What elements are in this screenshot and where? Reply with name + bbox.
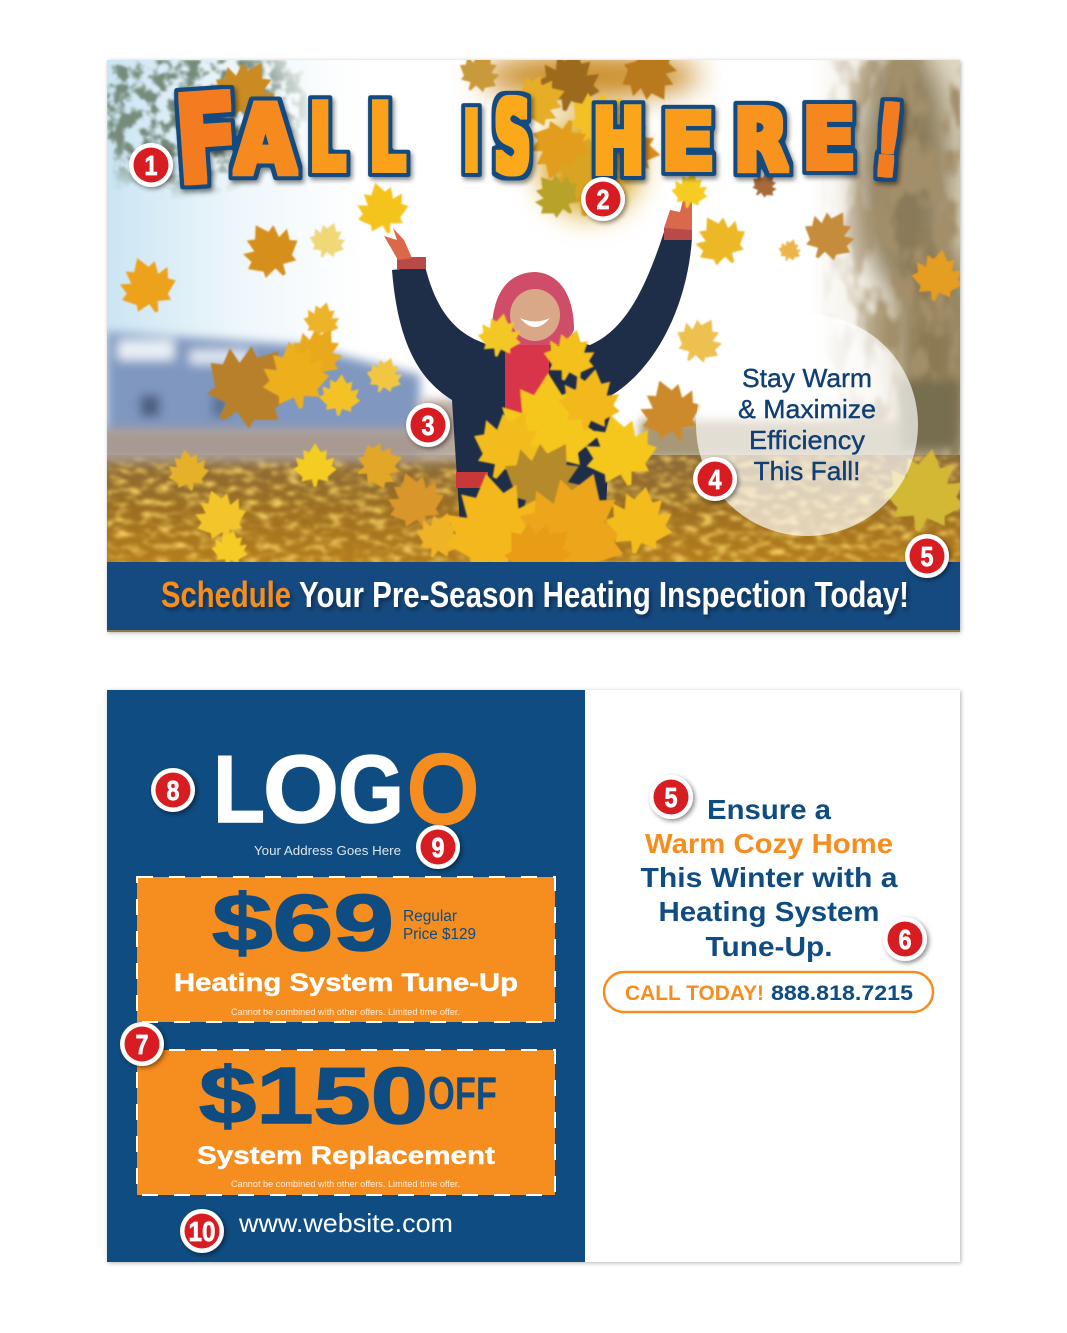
callout: translucent circle: Efficiency (749, 425, 865, 455)
banner: schedule inspection (107, 562, 960, 632)
photo: child throwing autumn leaves (107, 60, 960, 562)
callout: translucent circle: & Maximize (738, 394, 876, 424)
coupon: $150 off: Cannot be combined with other offers. Limited time offer. (231, 1179, 460, 1189)
callout: translucent circle: Stay Warm (742, 363, 872, 393)
coupon: $69 tune-up: $69 (212, 878, 394, 967)
logo: O (263, 736, 339, 843)
coupon: $150 off: OFF (428, 1067, 497, 1119)
panel: blue coupon column (107, 690, 585, 1262)
panel: postcard back (107, 690, 960, 1262)
badge 7: 7 (136, 1029, 148, 1060)
badge 6: 6 (898, 924, 912, 955)
figure: child in winter jacket (384, 188, 692, 525)
message: warm cozy home: Warm Cozy Home (645, 828, 893, 859)
title: Fall Is Here: A (235, 86, 296, 196)
badge 1: 1 (144, 150, 158, 181)
badge 9: 9 (432, 832, 444, 863)
message: warm cozy home: Heating System (658, 896, 880, 927)
badge 2: 2 (596, 184, 610, 215)
call to action pill: CALL TODAY! (625, 982, 764, 1005)
title: Fall Is Here (171, 69, 906, 212)
badge 10: 10 (188, 1216, 216, 1247)
coupon: $150 off: $150 (199, 1051, 428, 1140)
address: Your Address Goes Here (254, 843, 401, 858)
coupon: $69 tune-up (137, 877, 555, 1022)
badge 4: 4 (708, 464, 722, 495)
message: warm cozy home: Ensure a (707, 794, 831, 825)
panel: postcard front (100, 36, 975, 632)
message: warm cozy home: Tune-Up. (706, 931, 832, 962)
badge 8 (151, 768, 195, 812)
title: Fall Is Here: E (802, 90, 856, 188)
call to action pill: 888.818.7215 (771, 982, 913, 1005)
badge 4 (693, 457, 737, 501)
badge 5 front (905, 534, 949, 578)
title: Fall Is Here: R (734, 91, 788, 191)
title: Fall Is Here: F (171, 69, 243, 212)
badge 1 (129, 143, 173, 187)
title: Fall Is Here: ! (871, 84, 906, 198)
badge 5 back (649, 775, 693, 819)
badge 6 (883, 917, 927, 961)
logo: G (338, 736, 404, 843)
coupon: $150 off: System Replacement (197, 1142, 496, 1170)
callout: translucent circle: This Fall! (754, 456, 860, 486)
coupon: $150 off (137, 1050, 555, 1195)
logo: L (213, 736, 265, 843)
banner: schedule inspection: Schedule (161, 574, 291, 615)
badge 2 (581, 177, 625, 221)
badge 3: 3 (422, 410, 434, 441)
coupon: $69 tune-up: Regular (403, 908, 457, 925)
coupon: $69 tune-up: Price $129 (403, 926, 476, 943)
leaves (119, 60, 960, 562)
badge 7 (120, 1022, 164, 1066)
banner: schedule inspection: Your Pre-Season Heating Inspection Today! (299, 574, 909, 615)
title: Fall Is Here: I (465, 95, 478, 190)
badge 9 (416, 825, 460, 869)
logo: O (408, 736, 478, 843)
title: Fall Is Here: S (495, 79, 530, 196)
website: www.website.com (238, 1208, 453, 1238)
title: Fall Is Here: E (661, 98, 715, 188)
title: Fall Is Here: L (370, 84, 405, 192)
title: Fall Is Here: H (593, 90, 644, 195)
message: warm cozy home (640, 794, 898, 962)
coupon: $69 tune-up: Cannot be combined with other offers. Limited time offer. (231, 1007, 460, 1017)
logo (213, 736, 478, 843)
badge 10 (180, 1209, 224, 1253)
callout: translucent circle (696, 314, 918, 536)
badge 5 back: 5 (664, 782, 678, 813)
message: warm cozy home: This Winter with a (640, 862, 898, 893)
call to action pill (604, 972, 933, 1012)
coupon: $69 tune-up: Heating System Tune-Up (174, 969, 518, 997)
badge 3 (406, 403, 450, 447)
badge 8: 8 (166, 775, 180, 806)
badge 5 front: 5 (920, 541, 934, 572)
title: Fall Is Here: L (310, 84, 345, 192)
